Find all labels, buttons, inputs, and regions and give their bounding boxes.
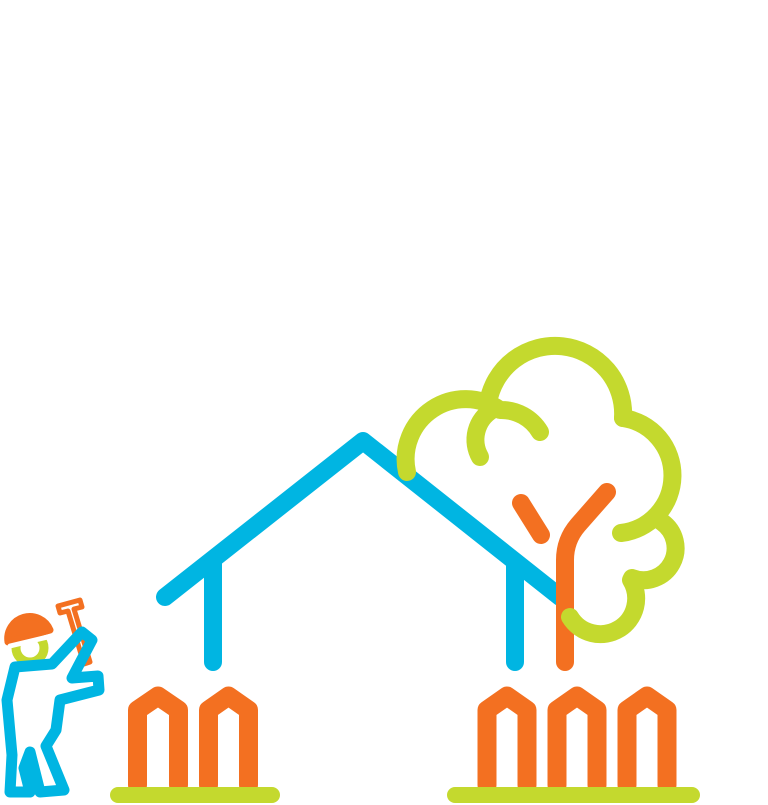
- worker: [7, 600, 99, 792]
- tree trunk: [521, 492, 607, 662]
- fence right: [487, 696, 667, 785]
- tree canopy: [406, 346, 676, 634]
- fence left: [138, 696, 248, 785]
- ground lines: [118, 787, 692, 803]
- house roof and posts: [165, 441, 560, 662]
